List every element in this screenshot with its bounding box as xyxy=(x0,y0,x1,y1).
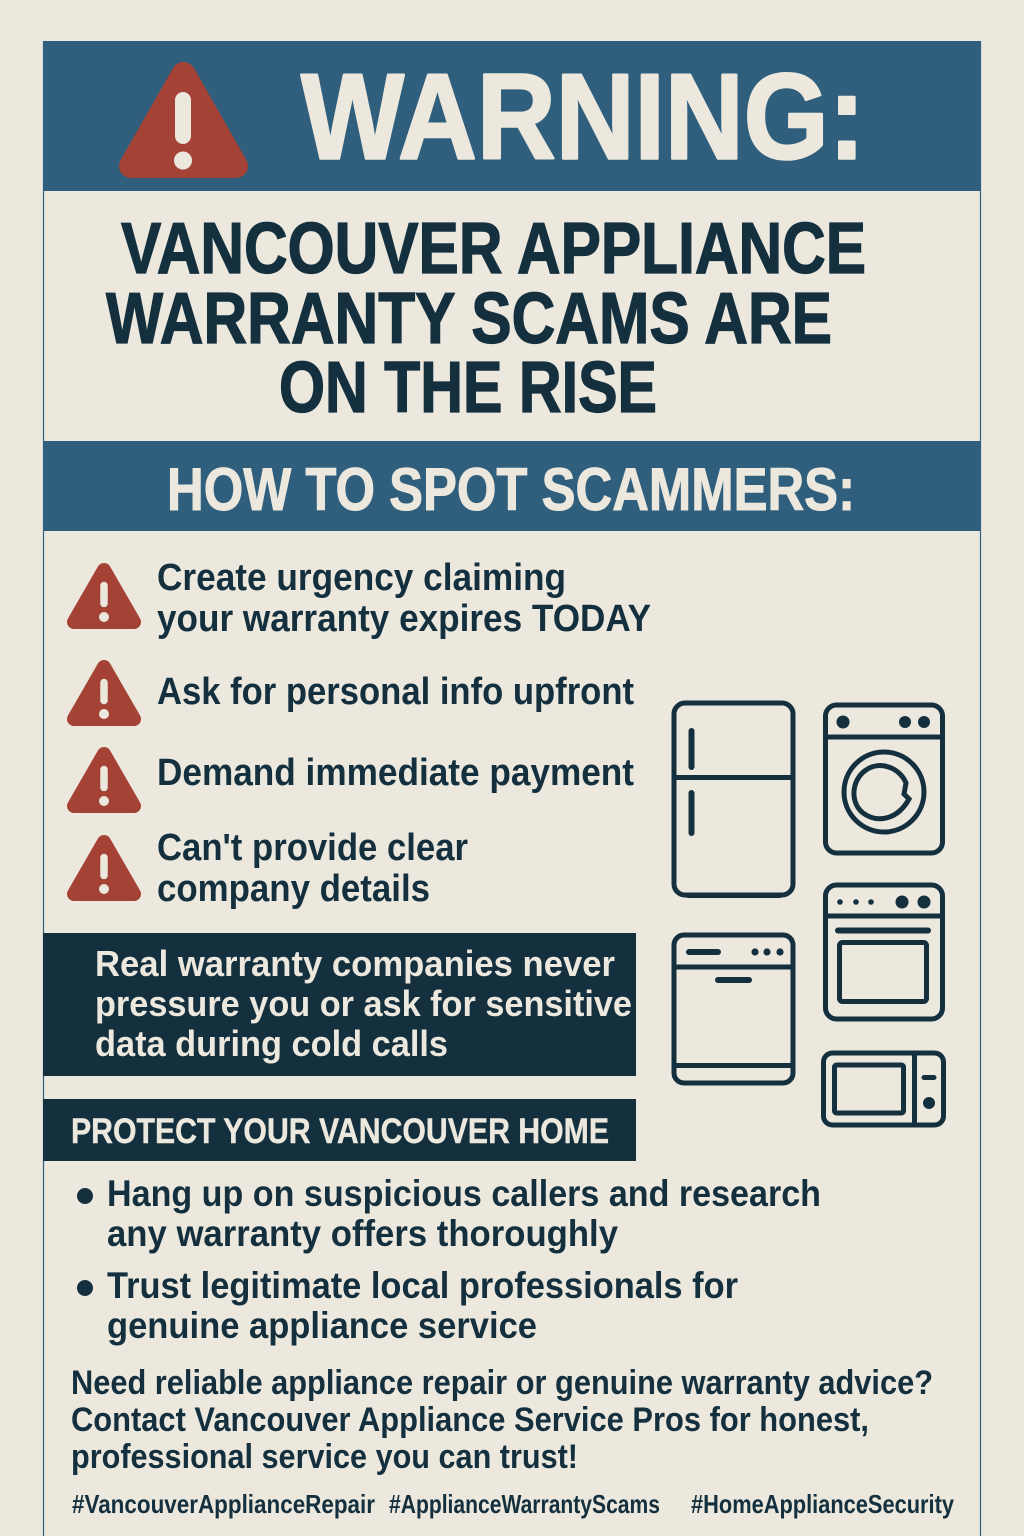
list: protection tips xyxy=(77,1173,821,1346)
panel: how to spot scammers banner xyxy=(43,441,981,531)
text: immediate payment: Demand immediate payment xyxy=(157,752,634,794)
list: protection tips: Trust legitimate local professionals for xyxy=(107,1265,738,1306)
title: VANCOUVER APPLIANCE xyxy=(121,209,866,289)
panel: protect your home heading: PROTECT YOUR VANCOUVER HOME xyxy=(71,1112,609,1151)
text: hashtags xyxy=(72,1489,954,1519)
text: call to action: Need reliable appliance repair or genuine warranty advice? xyxy=(71,1364,933,1402)
text: company details: company details xyxy=(157,868,430,910)
text: company details xyxy=(157,827,468,910)
text: personal info: Ask for personal info upfront xyxy=(157,671,634,713)
icon: microwave xyxy=(824,1053,944,1125)
panel: protect your home heading xyxy=(43,1099,636,1161)
text: call to action: professional service you can trust! xyxy=(71,1438,578,1476)
text: hashtags: #HomeApplianceSecurity xyxy=(691,1489,954,1519)
text: call to action: Contact Vancouver Appliance Service Pros for honest, xyxy=(71,1401,869,1439)
panel: warning header xyxy=(43,41,981,191)
text: hashtags: #ApplianceWarrantyScams xyxy=(389,1489,660,1519)
icon: warning triangle 3 xyxy=(74,754,134,806)
icons: appliances xyxy=(674,703,944,1125)
list: protection tips: Hang up on suspicious callers and research xyxy=(107,1173,821,1214)
icon: fridge xyxy=(674,703,793,896)
text: call to action xyxy=(71,1364,933,1476)
list: scammer warning signs xyxy=(74,557,651,910)
icon: warning triangle 1 xyxy=(74,570,134,622)
text: urgency: your warranty expires TODAY xyxy=(157,598,651,640)
icon: dishwasher xyxy=(674,935,793,1083)
callout: real warranty companies: Real warranty companies never xyxy=(95,943,615,984)
text: hashtags: #VancouverApplianceRepair xyxy=(72,1489,375,1519)
title: ON THE RISE xyxy=(279,348,657,428)
title: WARRANTY SCAMS ARE xyxy=(106,279,832,359)
icon: large warning triangle xyxy=(131,74,236,170)
icon: oven xyxy=(826,885,942,1019)
icon: warning triangle 2 xyxy=(74,667,134,719)
panel: how to spot scammers banner: HOW TO SPOT SCAMMERS: xyxy=(167,456,855,523)
text: urgency: Create urgency claiming xyxy=(157,557,566,599)
list: protection tips: any warranty offers thoroughly xyxy=(107,1213,618,1254)
callout: real warranty companies xyxy=(43,933,636,1076)
callout: real warranty companies: data during cold calls xyxy=(95,1023,448,1064)
icon: warning triangle 4 xyxy=(74,842,134,894)
text: urgency xyxy=(157,557,651,640)
text: company details: Can't provide clear xyxy=(157,827,468,869)
icon: washing machine xyxy=(826,705,942,853)
title xyxy=(106,209,866,428)
heading: warning: WARNING: xyxy=(301,48,865,184)
callout: real warranty companies: pressure you or ask for sensitive xyxy=(95,983,632,1024)
list: protection tips: genuine appliance service xyxy=(107,1305,537,1346)
